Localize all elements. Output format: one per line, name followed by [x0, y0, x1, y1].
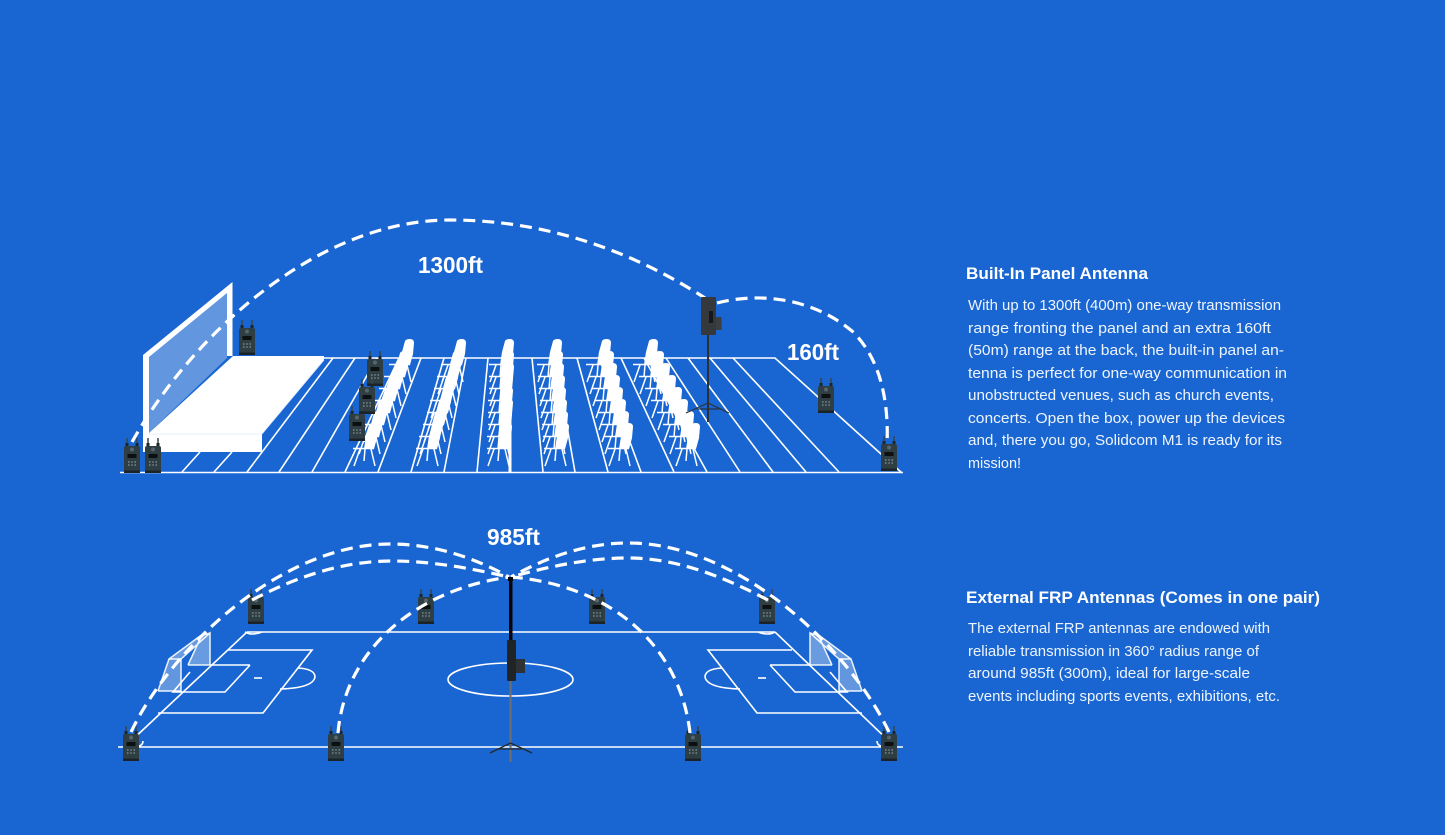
body copy: The external FRP antennas are endowed with — [968, 621, 1270, 637]
diagram: built-in panel antenna venue — [120, 220, 903, 473]
seating rows — [353, 339, 700, 466]
diagram: external FRP antennas football field — [118, 524, 903, 762]
base station on tripod — [686, 297, 729, 422]
body copy — [968, 298, 1287, 472]
stage — [149, 356, 324, 452]
heading: External FRP Antennas (Comes in one pair) — [966, 588, 1320, 607]
body copy: tenna is perfect for one-way communication in — [968, 366, 1287, 382]
floor lines — [120, 358, 903, 473]
body copy: and, there you go, Solidcom M1 is ready for its — [968, 433, 1282, 449]
range arcs — [131, 543, 889, 733]
goal: right — [810, 633, 862, 691]
body copy: mission! — [968, 456, 1021, 472]
label: 160ft: 160ft — [787, 339, 839, 365]
base station on tripod with FRP antenna — [490, 577, 532, 762]
body copy — [968, 621, 1280, 705]
receivers — [123, 589, 897, 761]
body copy: events including sports events, exhibitions, etc. — [968, 689, 1280, 705]
body copy: range fronting the panel and an extra 160ft — [968, 321, 1271, 337]
arc: 160ft back range — [717, 298, 887, 445]
text block: external FRP antennas — [966, 588, 1320, 705]
pitch lines — [118, 632, 903, 747]
body copy: concerts. Open the box, power up the devices — [968, 411, 1285, 427]
heading: Built-In Panel Antenna — [966, 264, 1149, 283]
goal: left — [158, 633, 210, 691]
body copy: unobstructed venues, such as church events, — [968, 388, 1274, 404]
projection screen — [143, 282, 232, 452]
label: 985ft: 985ft — [487, 524, 540, 550]
text block: built-in panel antenna — [966, 264, 1287, 472]
body copy: With up to 1300ft (400m) one-way transmission — [968, 298, 1281, 314]
body copy: reliable transmission in 360° radius range of — [968, 644, 1260, 660]
body copy: around 985ft (300m), ideal for large-scale — [968, 666, 1250, 682]
receivers — [124, 320, 897, 473]
arc: 1300ft front range — [132, 220, 705, 442]
body copy: (50m) range at the back, the built-in panel an- — [968, 343, 1284, 359]
label: 1300ft: 1300ft — [418, 252, 483, 278]
center aisle line — [508, 340, 512, 472]
